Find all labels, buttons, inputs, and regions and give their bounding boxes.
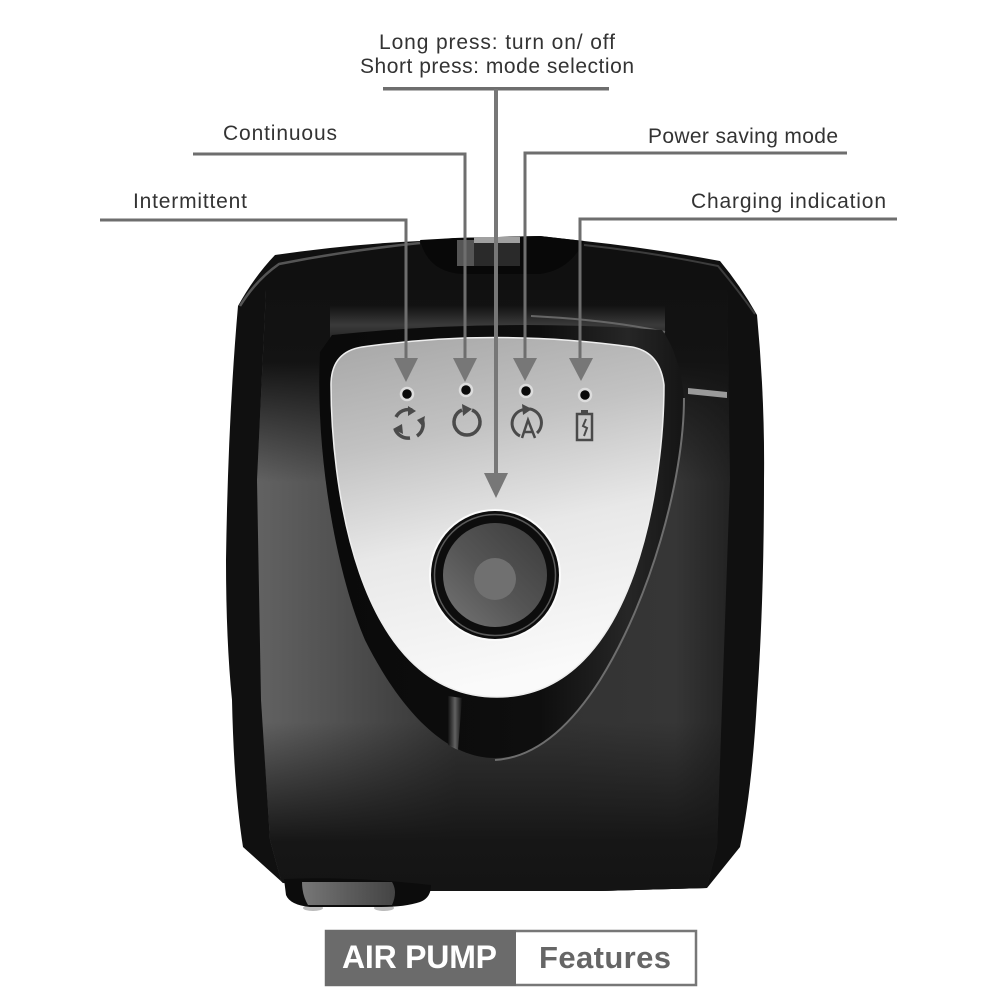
callout: mode button: Long press: turn on/ off [379, 31, 615, 54]
icon: power saving [512, 404, 541, 438]
icon: continuous [454, 404, 480, 435]
callout: continuous [193, 122, 477, 382]
indicator lights [401, 384, 591, 401]
title badge: Features [539, 940, 671, 975]
pump body [226, 236, 764, 895]
icon: battery [577, 410, 592, 440]
front face shading [257, 290, 730, 895]
panel: silver control face [331, 338, 664, 697]
callout: charging indication [569, 190, 897, 381]
callout: charging indication: Charging indication [691, 190, 886, 213]
upper body reflection [330, 310, 665, 338]
top mode button [457, 237, 520, 266]
right highlight streaks [688, 388, 727, 398]
title badge [325, 930, 696, 986]
main button [429, 509, 561, 641]
top centre notch [420, 236, 584, 274]
icon: intermittent [393, 406, 425, 438]
top edge highlights [240, 243, 420, 306]
title badge: AIR PUMP [342, 939, 497, 975]
surround outer highlight [495, 398, 684, 760]
air pump features infographic [100, 34, 897, 986]
callout: mode button: Short press: mode selection [360, 55, 634, 78]
callout: intermittent [100, 190, 418, 382]
callout: mode button [360, 31, 634, 498]
foot of the pump [284, 878, 431, 911]
callout: power saving mode: Power saving mode [648, 125, 838, 148]
callout: continuous: Continuous [223, 122, 337, 145]
dark surround of panel [319, 325, 684, 758]
callout: intermittent: Intermittent [133, 190, 247, 213]
callout: power saving mode [513, 125, 847, 381]
surround gloss [448, 696, 462, 750]
